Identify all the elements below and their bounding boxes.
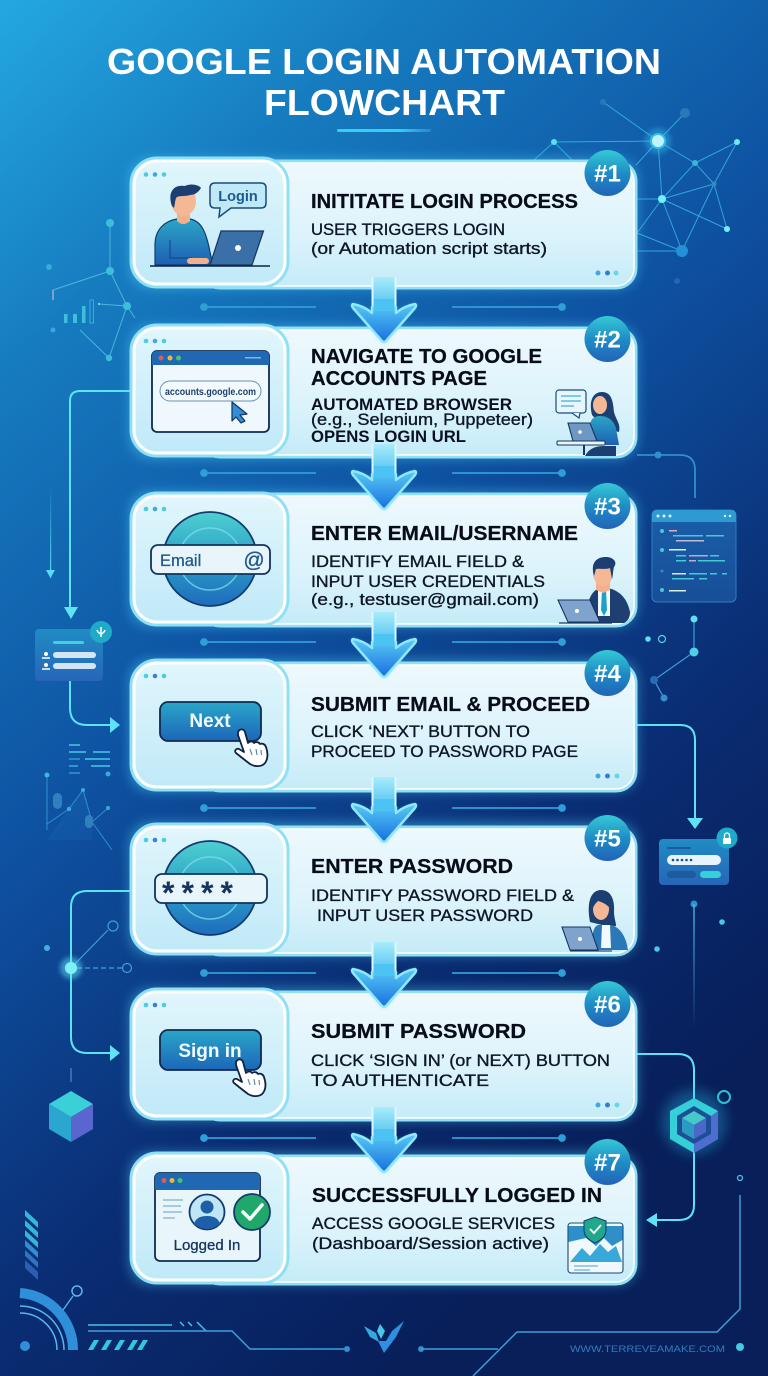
arrow: step 2 to 3 xyxy=(351,444,417,510)
icon: sign in button xyxy=(160,1030,265,1096)
text: step 3: ENTER EMAIL/USERNAME xyxy=(311,522,578,545)
text: step 7: ACCESS GOOGLE SERVICES xyxy=(312,1214,555,1233)
icon: dashboard xyxy=(568,1217,623,1273)
footer dot xyxy=(736,1343,744,1351)
text: step 2: OPENS LOGIN URL xyxy=(311,427,466,446)
arrow: step 1 to 2 xyxy=(351,277,417,343)
badge: 5: #5 xyxy=(594,826,621,852)
title: FLOWCHART xyxy=(264,82,505,123)
icon: password field: **** xyxy=(162,875,234,911)
badge: 2 xyxy=(584,316,630,362)
text: step 1: INITITATE LOGIN PROCESS xyxy=(311,190,578,213)
network: top left xyxy=(46,219,135,361)
icon: email field: @ xyxy=(243,549,265,572)
text: step 1: (or Automation script starts) xyxy=(311,239,547,258)
figure: woman with laptop xyxy=(562,890,628,951)
title xyxy=(107,41,661,123)
icon: email field: Email xyxy=(160,552,201,570)
arrow: step 6 to 7 xyxy=(351,1107,417,1173)
badge: 7 xyxy=(584,1139,630,1185)
title underline xyxy=(337,129,431,132)
text: step 3: INPUT USER CREDENTIALS xyxy=(311,572,545,591)
badge: 5 xyxy=(584,815,630,861)
text: step 3 xyxy=(311,522,578,609)
icon: user at laptop: Login xyxy=(218,189,258,205)
icon: sign in button: Sign in xyxy=(178,1041,242,1062)
badge: 3 xyxy=(584,483,630,529)
connector: step 2 to side form xyxy=(46,391,132,733)
text: step 1 xyxy=(311,190,578,258)
arrow: step 4 to 5 xyxy=(351,777,417,843)
figure: man with laptop xyxy=(558,557,630,623)
connector: step 4 to password card xyxy=(637,725,703,829)
bottom left stripes xyxy=(25,1210,38,1280)
bottom circuit lines xyxy=(88,1195,740,1376)
text: step 2: AUTOMATED BROWSER xyxy=(311,395,512,414)
panel: step 1 xyxy=(130,150,637,288)
icon: logged in browser xyxy=(155,1173,270,1261)
text: step 5: IDENTIFY PASSWORD FIELD & xyxy=(311,886,575,905)
text: step 6: SUBMIT PASSWORD xyxy=(311,1020,526,1043)
text: step 6: CLICK ‘SIGN IN’ (or NEXT) BUTTON xyxy=(311,1051,610,1070)
icon: logged in browser: Logged In xyxy=(174,1237,240,1254)
icon: next button xyxy=(160,702,267,766)
badge: 6 xyxy=(584,981,630,1027)
badge: 3: #3 xyxy=(594,494,621,520)
text: step 4: SUBMIT EMAIL & PROCEED xyxy=(311,693,590,716)
footer url: WWW.TERREVEAMAKE.COM xyxy=(570,1344,725,1355)
badge: 7: #7 xyxy=(594,1150,621,1176)
network: top right xyxy=(534,99,740,284)
logo mark xyxy=(364,1321,404,1353)
code lines decoration xyxy=(69,744,110,776)
panel: step 2 xyxy=(130,316,637,458)
bar chart decoration xyxy=(64,300,94,323)
line chart decoration xyxy=(44,772,112,850)
code window xyxy=(652,510,736,602)
connector: step 5 to step 6 xyxy=(71,891,132,1061)
text: step 2: (e.g., Selenium, Puppeteer) xyxy=(311,410,533,429)
panel: step 3 xyxy=(130,483,637,626)
panel: step 4 xyxy=(130,650,637,791)
connector: step 6 through hexagon to step 7 xyxy=(637,1054,694,1227)
badge: 4: #4 xyxy=(594,660,621,688)
text: step 4: PROCEED TO PASSWORD PAGE xyxy=(311,742,578,761)
network: right middle xyxy=(645,616,698,702)
text: step 3: (e.g., testuser@gmail.com) xyxy=(311,590,539,609)
separators between steps xyxy=(201,304,565,1141)
title: GOOGLE LOGIN AUTOMATION xyxy=(107,41,661,82)
node network: left lower xyxy=(44,921,132,1082)
icon: password field xyxy=(155,841,267,935)
bottom left arc xyxy=(20,1286,82,1351)
panel: step 6 xyxy=(130,981,637,1120)
text: step 6: TO AUTHENTICATE xyxy=(311,1071,489,1090)
badge: 1: #1 xyxy=(594,160,621,188)
arrow: step 3 to 4 xyxy=(351,612,417,678)
icon: browser with URL: accounts.google.com xyxy=(165,387,256,398)
hexagon cube icon xyxy=(662,1090,726,1154)
text: step 7: (Dashboard/Session active) xyxy=(312,1234,549,1253)
panel: step 5 xyxy=(130,815,637,955)
text: step 5: ENTER PASSWORD xyxy=(311,855,513,878)
text: step 5: INPUT USER PASSWORD xyxy=(317,906,533,925)
connector: step 2 to code window xyxy=(637,452,695,498)
icon: next button: Next xyxy=(189,711,231,732)
badge: 6: #6 xyxy=(594,992,621,1018)
badge: 1 xyxy=(584,150,630,196)
password card xyxy=(659,828,738,885)
text: step 2: NAVIGATE TO GOOGLE xyxy=(311,345,542,368)
text: step 7 xyxy=(312,1184,602,1253)
icon: browser with URL xyxy=(152,351,269,432)
text: step 5 xyxy=(311,855,575,925)
text: step 2 xyxy=(311,345,542,446)
right side dots xyxy=(654,900,742,1180)
panel: step 7 xyxy=(130,1139,637,1284)
icon: email field xyxy=(151,512,270,606)
icon: user at laptop xyxy=(150,183,270,266)
side form card xyxy=(35,621,112,681)
text: step 6 xyxy=(311,1020,610,1090)
text: step 4 xyxy=(311,693,590,761)
badge: 2: #2 xyxy=(594,326,621,354)
text: step 4: CLICK ‘NEXT’ BUTTON TO xyxy=(311,722,530,741)
badge: 4 xyxy=(584,650,630,696)
text: step 1: USER TRIGGERS LOGIN xyxy=(311,220,505,239)
cube icon xyxy=(49,1091,93,1142)
text: step 3: IDENTIFY EMAIL FIELD & xyxy=(311,552,525,571)
text: step 2: ACCOUNTS PAGE xyxy=(311,367,487,390)
arrow: step 5 to 6 xyxy=(351,942,417,1008)
text: step 7: SUCCESSFULLY LOGGED IN xyxy=(312,1184,602,1207)
figure: woman with chat bubble xyxy=(556,390,619,456)
